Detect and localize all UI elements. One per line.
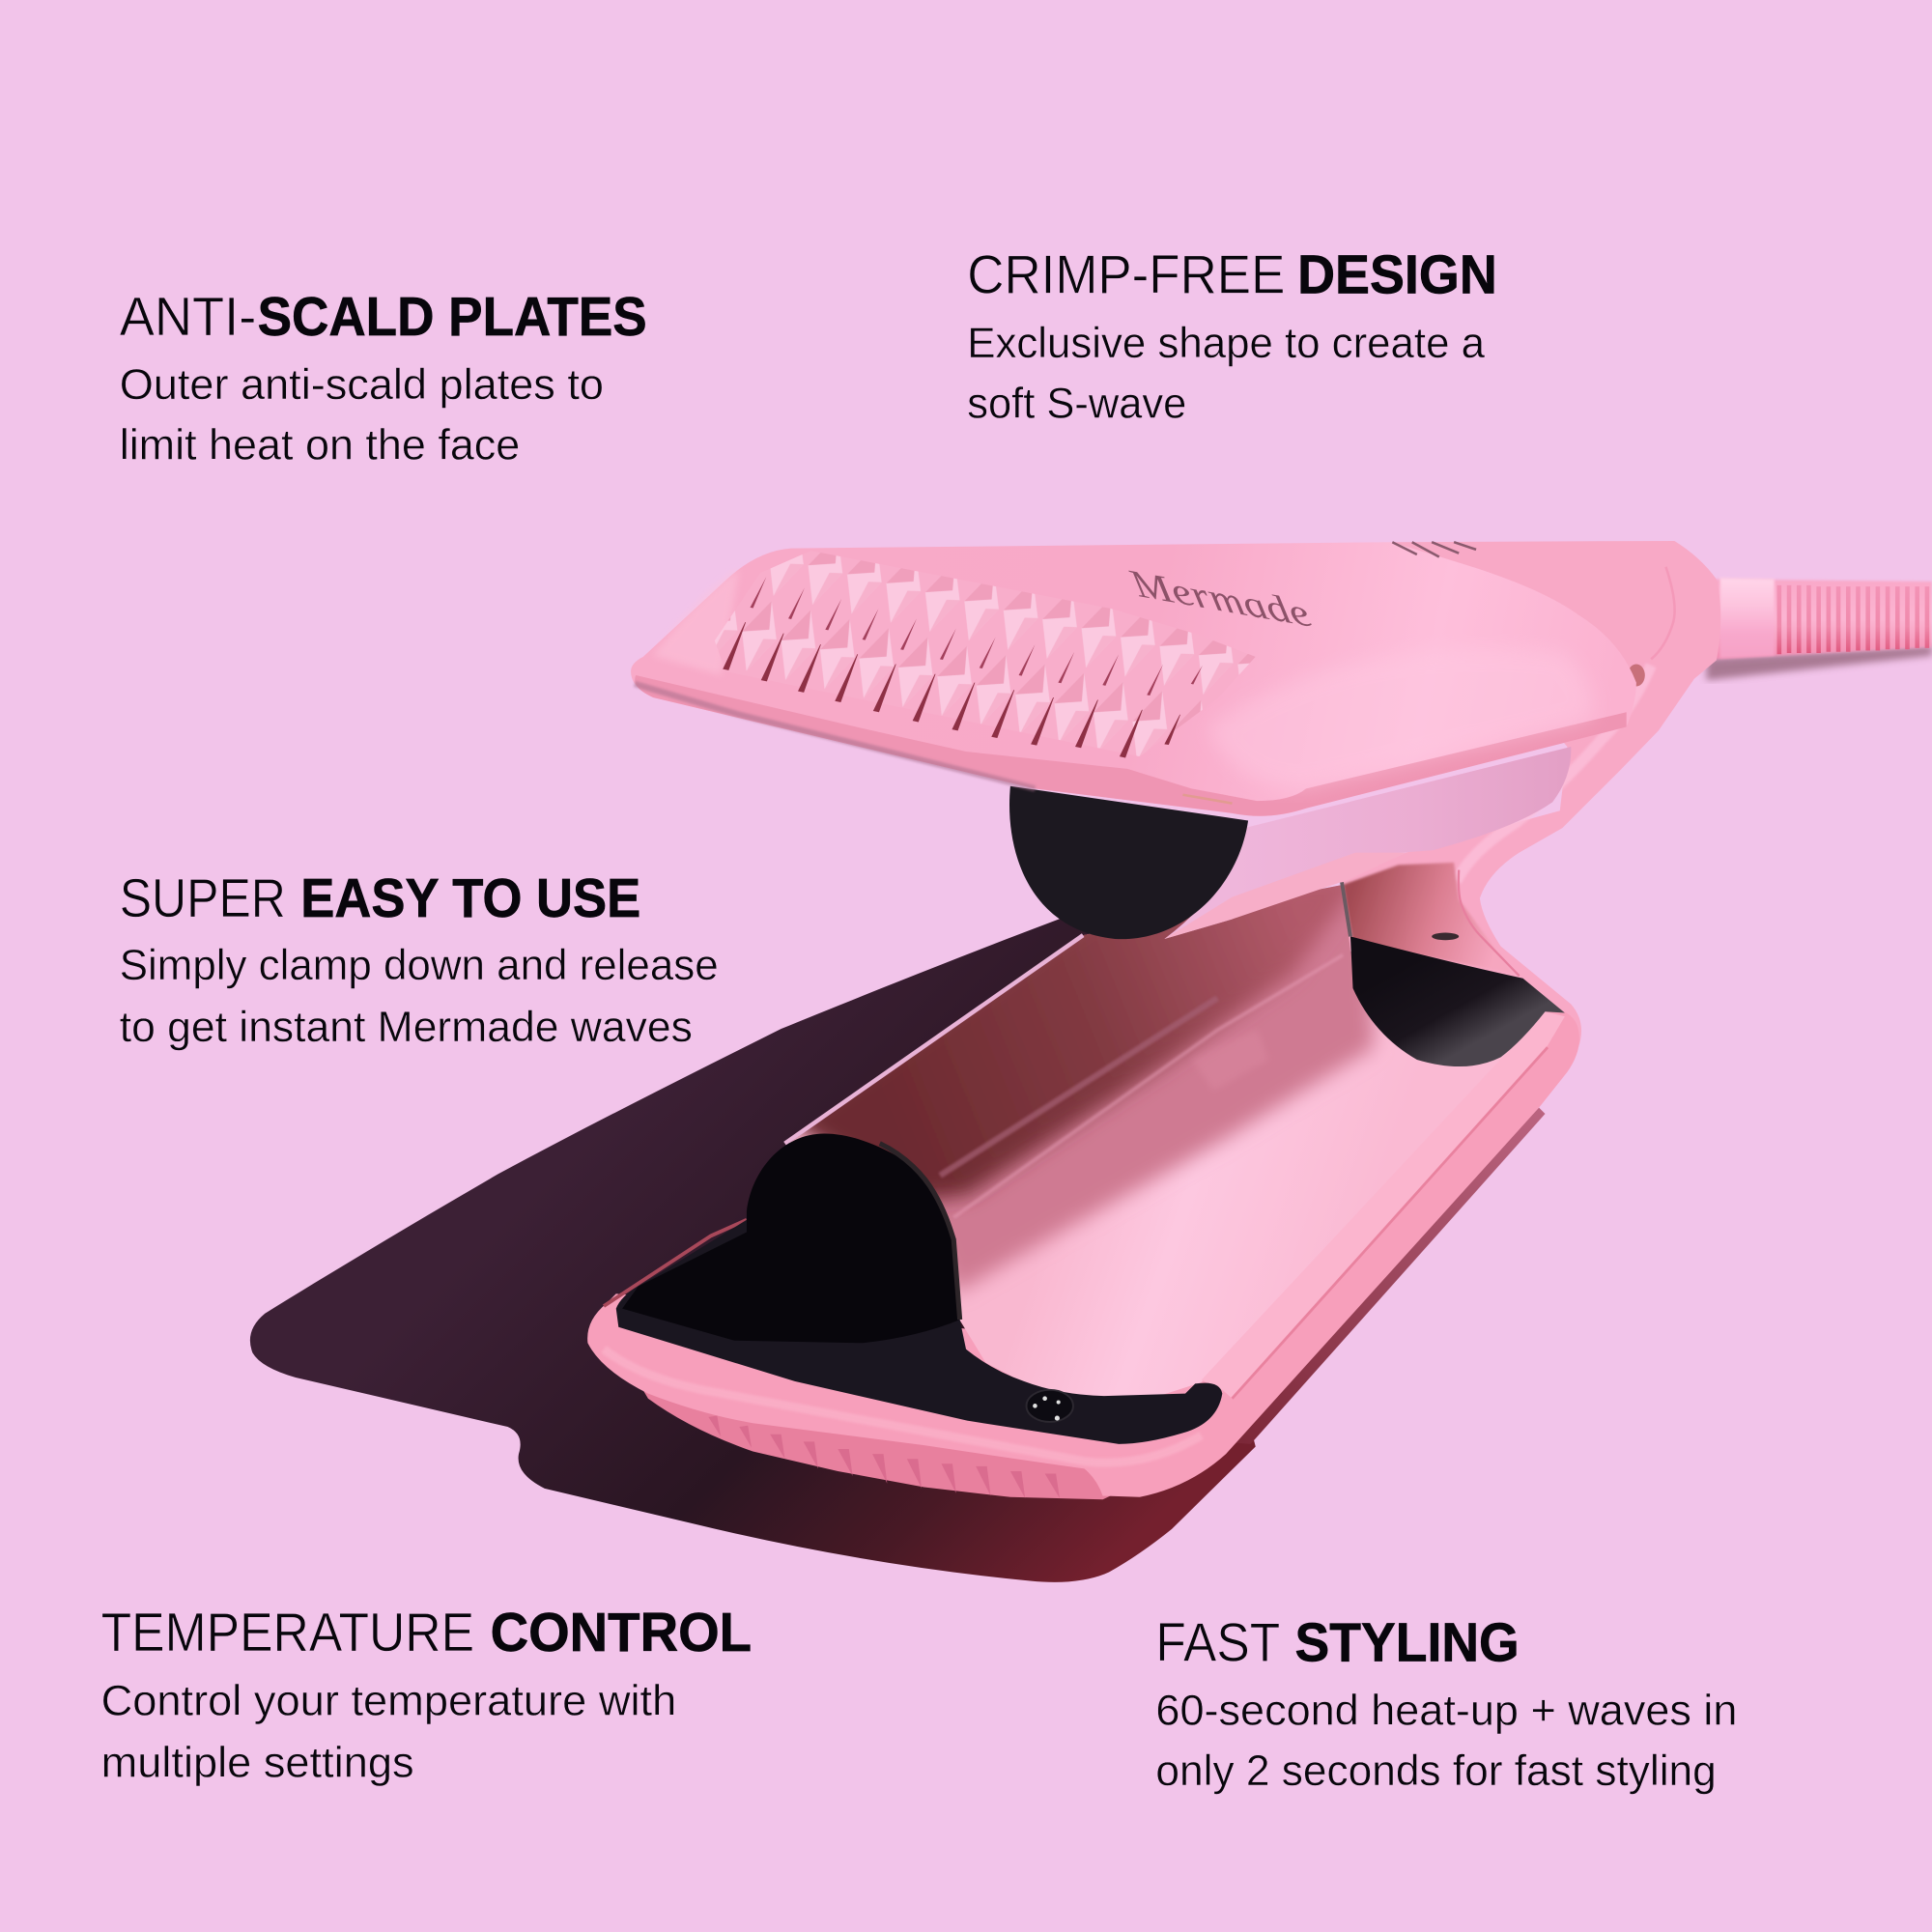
heading <box>967 244 1497 305</box>
notch at hinge <box>1628 665 1645 686</box>
lower tray underside texture <box>640 1368 1146 1499</box>
description <box>120 942 719 1051</box>
feature: super easy to use <box>120 867 719 1051</box>
product: hair waver illustration <box>250 541 1932 1582</box>
heading: CONTROL <box>491 1602 752 1662</box>
feature: fast styling <box>1155 1611 1737 1795</box>
upper slits <box>751 577 1203 696</box>
description: soft S-wave <box>967 380 1186 427</box>
rim inner band and groove <box>1202 1011 1565 1399</box>
description: to get instant Mermade waves <box>120 1004 693 1051</box>
description: 60-second heat-up + waves in <box>1155 1688 1737 1735</box>
lower tray curved plate interior <box>789 885 1508 1397</box>
heading <box>120 867 640 928</box>
cast shadow <box>250 914 1256 1582</box>
rim soft highlight <box>604 1350 1202 1463</box>
description <box>101 1678 676 1786</box>
feature: anti-scald plates <box>120 286 647 469</box>
heading: FAST <box>1155 1611 1280 1672</box>
description <box>120 361 604 469</box>
description <box>967 320 1485 427</box>
description: only 2 seconds for fast styling <box>1155 1747 1717 1795</box>
stem contour line <box>1459 870 1520 976</box>
description: limit heat on the face <box>120 422 520 469</box>
black end cap upper <box>1350 936 1565 1066</box>
hinge stem and handle <box>1341 541 1720 1047</box>
left rim line <box>604 1220 747 1306</box>
brand logo: Mermade <box>1118 560 1321 637</box>
rim shadow strip <box>1220 1108 1545 1444</box>
upper shell <box>631 542 1636 816</box>
lower slits <box>723 622 1180 757</box>
heading <box>1155 1611 1520 1672</box>
description: Outer anti-scald plates to <box>120 361 604 409</box>
handle seam and shading <box>1651 567 1675 659</box>
black end cap lower <box>616 1133 1222 1444</box>
heading: ANTI- <box>120 286 256 347</box>
description <box>1155 1688 1737 1795</box>
feature: crimp-free design <box>967 244 1497 427</box>
diamond texture panel <box>715 551 1256 757</box>
heading: SCALD PLATES <box>258 286 647 347</box>
heading: DESIGN <box>1297 244 1497 305</box>
brand logo fragment on rear shell <box>1392 542 1476 557</box>
screw on stem <box>1432 933 1459 940</box>
description: Exclusive shape to create a <box>967 320 1485 367</box>
heading: TEMPERATURE <box>101 1602 474 1662</box>
heading: EASY TO USE <box>300 867 640 928</box>
upper barrel underside <box>1164 747 1571 939</box>
heading: SUPER <box>120 867 286 928</box>
grey edge of upper cap <box>1342 882 1350 936</box>
heading: STYLING <box>1295 1611 1520 1672</box>
barrel lower strip <box>1164 853 1406 939</box>
heading: CRIMP-FREE <box>967 244 1285 305</box>
lower tray outer rim <box>587 1008 1579 1497</box>
stem reflection <box>1343 863 1513 974</box>
description: Simply clamp down and release <box>120 942 719 989</box>
feature: temperature control <box>101 1602 752 1786</box>
black plate upper <box>1009 786 1248 939</box>
screw lower <box>1026 1390 1073 1422</box>
stem highlight band <box>1457 666 1651 881</box>
description: multiple settings <box>101 1739 414 1786</box>
power cord <box>1707 578 1932 680</box>
description: Control your temperature with <box>101 1678 676 1725</box>
heading <box>101 1602 752 1662</box>
barrel highlight edge <box>784 935 1083 1144</box>
